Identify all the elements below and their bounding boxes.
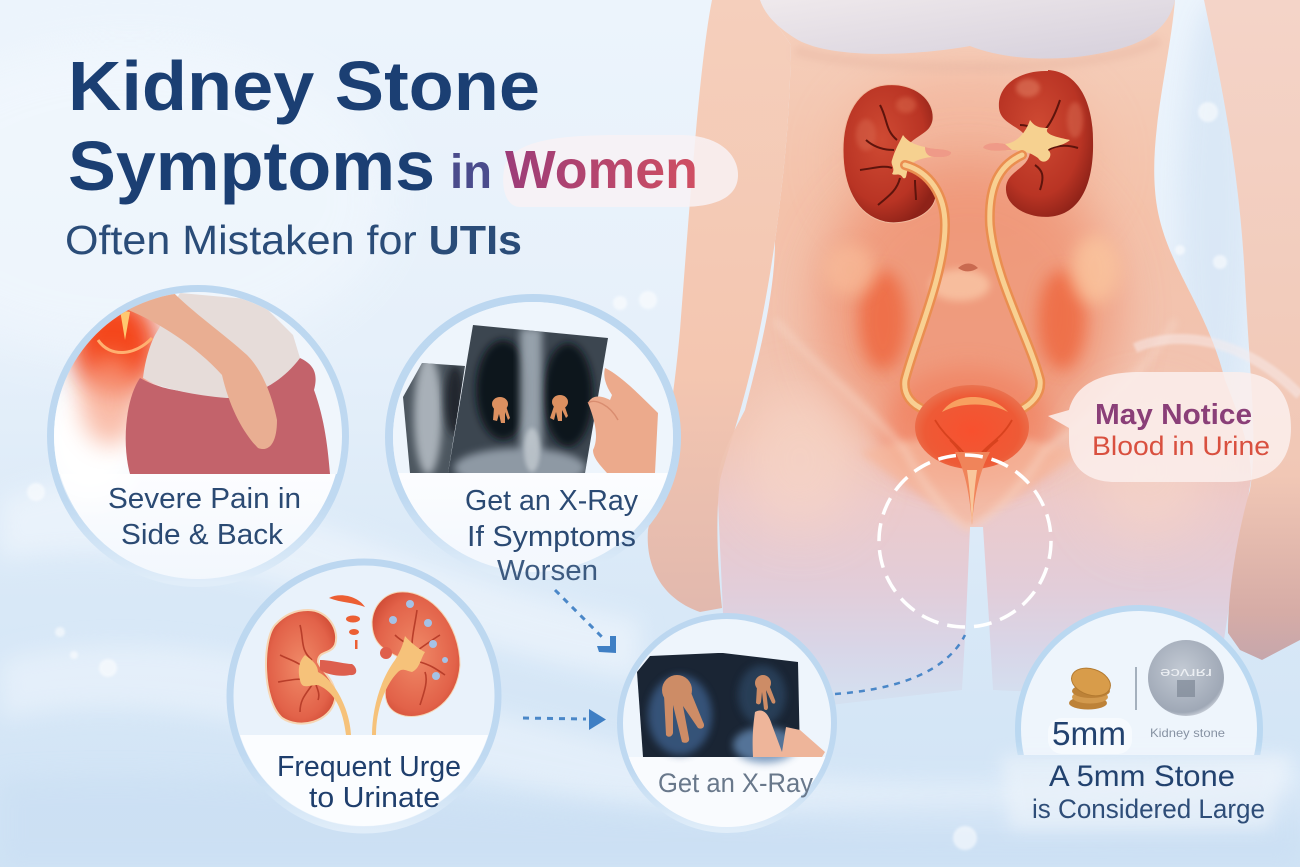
highlighted area dashed circle xyxy=(879,455,1051,627)
arrow: X-ray to figure xyxy=(835,635,965,694)
title: in xyxy=(450,146,492,199)
title: Women xyxy=(505,140,698,200)
arrow: urge to X-ray xyxy=(523,709,606,730)
label: If Symptoms xyxy=(467,521,636,553)
navel xyxy=(958,264,978,271)
label xyxy=(277,751,461,814)
right kidney xyxy=(983,70,1093,217)
bra xyxy=(760,0,1175,59)
panel: severe pain xyxy=(40,285,360,583)
label xyxy=(108,483,301,551)
hand holding film xyxy=(588,368,658,473)
callout: blood in urine xyxy=(1048,372,1291,482)
torso shadow under bust xyxy=(795,40,1160,68)
panel: get an x-ray xyxy=(620,616,840,837)
callout: blood in urine: May Notice xyxy=(1095,399,1252,431)
callout: blood in urine: Blood in Urine xyxy=(1092,431,1270,461)
figure: woman's torso with urinary tract xyxy=(648,0,1300,705)
kidney illustration xyxy=(266,592,460,735)
panel: frequent urge xyxy=(230,562,500,835)
label: Side & Back xyxy=(121,519,283,551)
left kidney xyxy=(843,85,951,223)
torso and legs xyxy=(717,0,1251,705)
icon: stacked stones xyxy=(1068,663,1114,710)
bladder xyxy=(915,385,1029,525)
title: Often Mistaken for UTIs xyxy=(65,217,522,263)
arrow: X-ray down to panel xyxy=(555,590,616,653)
label: Get an X-Ray xyxy=(658,768,813,798)
panel: 5mm stone xyxy=(1003,605,1280,832)
label xyxy=(465,485,638,587)
title xyxy=(65,47,738,263)
label: Frequent Urge xyxy=(277,751,461,783)
panel: 5mm stone: 5mm xyxy=(1052,715,1126,752)
right arm xyxy=(1204,0,1300,660)
decorative ribbon xyxy=(1135,339,1300,395)
ureters xyxy=(905,155,1040,410)
label: Severe Pain in xyxy=(108,483,301,515)
panel: 5mm stone: Kidney stone xyxy=(1150,726,1225,740)
panel: X-ray if symptoms worsen xyxy=(389,290,680,587)
panel: 5mm stone: A 5mm Stone xyxy=(1049,760,1235,793)
back film xyxy=(403,363,465,473)
left arm xyxy=(648,0,791,612)
abdomen glow xyxy=(753,72,1142,531)
main film xyxy=(448,325,608,473)
panel: 5mm stone: is Considered Large xyxy=(1032,794,1265,824)
title: Kidney Stone xyxy=(68,47,540,125)
label: Get an X-Ray xyxy=(465,485,638,517)
label: Worsen xyxy=(497,555,598,587)
icon: silver coin: əɔʌɹʁɹ xyxy=(1160,664,1212,679)
label: to Urinate xyxy=(309,782,440,814)
title: Symptoms xyxy=(68,127,435,205)
icon: silver coin xyxy=(1148,640,1224,716)
